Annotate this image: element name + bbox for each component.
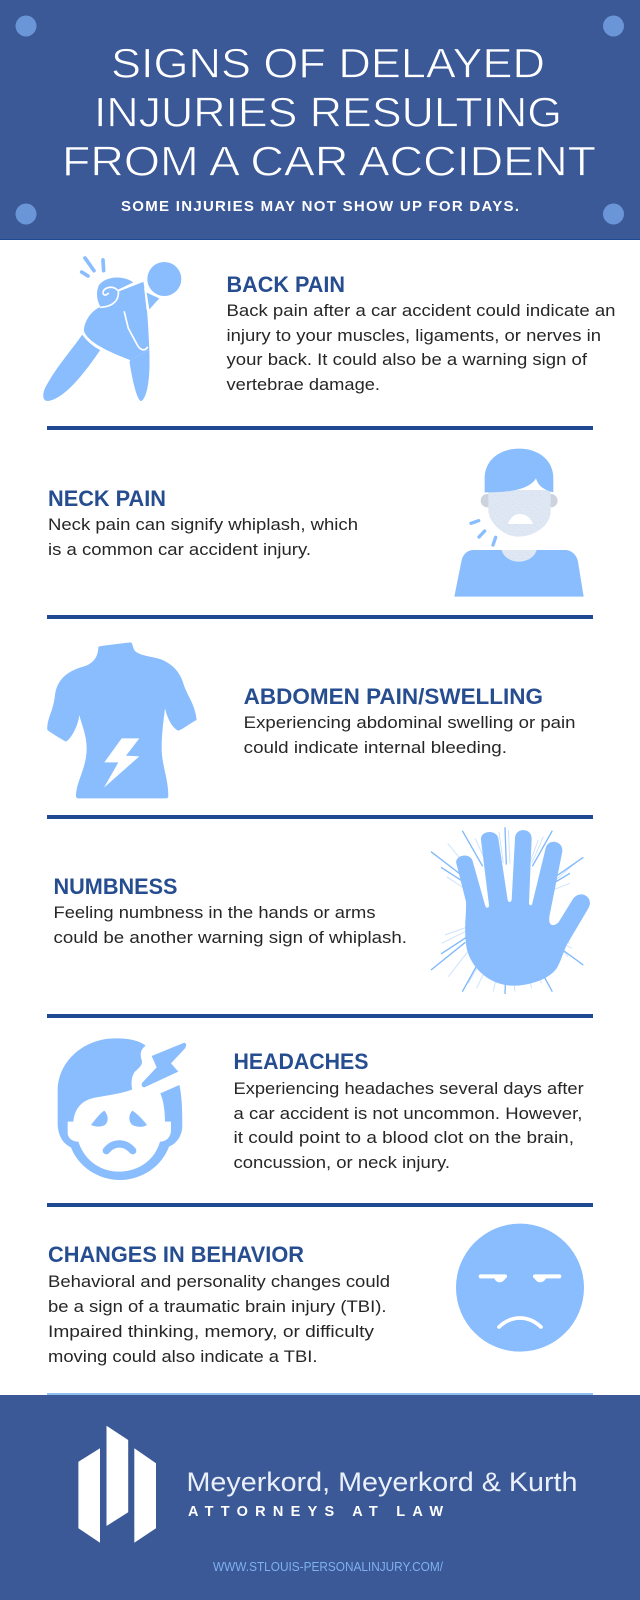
icon: head with lightning bolt: [58, 1038, 186, 1180]
logo mark: [78, 1426, 156, 1543]
panel: back pain: [43, 258, 615, 401]
text: behavior body: [48, 1272, 390, 1366]
subtitle: SOME INJURIES MAY NOT SHOW UP FOR DAYS.: [121, 198, 519, 215]
icon: torso with lightning bolt: [47, 642, 197, 798]
heading: headaches: HEADACHES: [234, 1049, 368, 1074]
icon: frowning face: [456, 1224, 584, 1352]
text: numbness body: Feeling numbness in the hands or arms: [54, 903, 376, 922]
text: headaches body: it could point to a blood clot on the brain,: [234, 1128, 574, 1147]
text: back pain body: vertebrae damage.: [226, 375, 380, 394]
text: back pain body: injury to your muscles, ligaments, or nerves in: [226, 326, 601, 345]
text: abdomen body: [244, 713, 575, 757]
firm name: Meyerkord, Meyerkord & Kurth: [186, 1467, 578, 1497]
header banner: [0, 0, 640, 240]
text: behavior body: Behavioral and personality changes could: [48, 1272, 390, 1291]
icon: person with back pain: [43, 258, 181, 401]
heading: neck pain: NECK PAIN: [48, 486, 166, 511]
heading: back pain: BACK PAIN: [226, 272, 345, 297]
text: back pain body: your back. It could also be a warning sign of: [226, 350, 587, 369]
title: INJURIES RESULTING: [94, 88, 562, 136]
text: neck pain body: [48, 515, 358, 559]
panel: numbness: [54, 827, 590, 994]
text: neck pain body: Neck pain can signify whiplash, which: [48, 515, 358, 534]
heading: behavior: CHANGES IN BEHAVIOR: [48, 1242, 304, 1267]
text: abdomen body: Experiencing abdominal swelling or pain: [244, 713, 575, 732]
text: headaches body: Experiencing headaches several days after: [234, 1079, 584, 1098]
panel: abdomen pain: [47, 642, 576, 798]
website url: WWW.STLOUIS-PERSONALINJURY.COM/: [213, 1560, 443, 1574]
text: headaches body: a car accident is not uncommon. However,: [234, 1104, 582, 1123]
footer: [0, 1395, 640, 1600]
text: numbness body: [54, 903, 407, 947]
panel: neck pain: [48, 449, 584, 597]
title: [62, 40, 596, 184]
firm tagline: ATTORNEYS AT LAW: [188, 1504, 443, 1520]
text: headaches body: [234, 1079, 584, 1172]
heading: numbness: NUMBNESS: [54, 874, 178, 899]
text: back pain body: [226, 301, 616, 394]
icon: man with neck pain: [454, 449, 584, 597]
icon: hand with numbness rays: [431, 827, 590, 994]
title: FROM A CAR ACCIDENT: [62, 138, 596, 184]
title: SIGNS OF DELAYED: [111, 40, 545, 86]
text: back pain body: Back pain after a car accident could indicate an: [226, 301, 616, 320]
text: behavior body: be a sign of a traumatic brain injury (TBI).: [48, 1297, 386, 1316]
text: numbness body: could be another warning sign of whiplash.: [54, 928, 407, 947]
text: abdomen body: could indicate internal bleeding.: [244, 738, 507, 757]
text: neck pain body: is a common car accident injury.: [48, 540, 311, 559]
panel: changes in behavior: [48, 1224, 584, 1366]
text: behavior body: Impaired thinking, memory, or difficulty: [48, 1322, 375, 1341]
text: headaches body: concussion, or neck injury.: [234, 1153, 450, 1172]
text: behavior body: moving could also indicate a TBI.: [48, 1347, 318, 1366]
heading: abdomen: ABDOMEN PAIN/SWELLING: [244, 684, 543, 709]
panel: headaches: [58, 1038, 584, 1180]
